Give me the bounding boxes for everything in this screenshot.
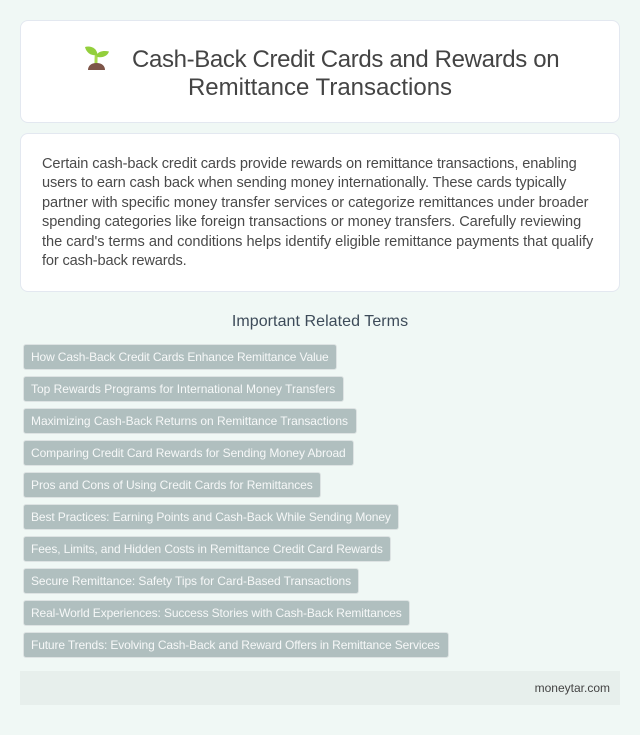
tag 6 — [23, 504, 399, 530]
tag 1: How Cash-Back Credit Cards Enhance Remittance Value — [31, 350, 329, 364]
paragraph — [42, 156, 594, 269]
tag 4: Comparing Credit Card Rewards for Sending Money Abroad — [31, 446, 346, 460]
panel: description — [20, 133, 620, 292]
tag 1 — [23, 344, 337, 370]
paragraph: for cash-back rewards. — [42, 253, 187, 269]
tag 3 — [23, 408, 357, 434]
tag 4 — [23, 440, 354, 466]
paragraph: partner with specific money transfer services or categorize remittances under broader — [42, 195, 588, 211]
tag 3: Maximizing Cash-Back Returns on Remittance Transactions — [31, 414, 348, 428]
tag 9: Real-World Experiences: Success Stories with Cash-Back Remittances — [31, 606, 402, 620]
paragraph: users to earn cash back when sending money internationally. These cards typically — [42, 175, 566, 191]
tag 9 — [23, 600, 410, 626]
paragraph: the card's terms and conditions helps identify eligible remittance payments that qualify — [42, 234, 593, 250]
tag 7: Fees, Limits, and Hidden Costs in Remittance Credit Card Rewards — [31, 542, 383, 556]
panel: title card — [20, 20, 620, 123]
tag 8: Secure Remittance: Safety Tips for Card-Based Transactions — [31, 574, 351, 588]
footer: moneytar.com — [535, 681, 610, 695]
paragraph: Certain cash-back credit cards provide rewards on remittance transactions, enabling — [42, 156, 577, 172]
tag 10 — [23, 632, 449, 658]
list: related term tags — [23, 344, 449, 658]
tag 5: Pros and Cons of Using Credit Cards for Remittances — [31, 478, 313, 492]
icon: sprout — [85, 46, 109, 70]
title line 2: Remittance Transactions — [188, 74, 452, 101]
tag 2 — [23, 376, 344, 402]
tag 6: Best Practices: Earning Points and Cash-Back While Sending Money — [31, 510, 391, 524]
tag 8 — [23, 568, 359, 594]
title line 1: Cash-Back Credit Cards and Rewards on — [132, 46, 559, 73]
paragraph: spending categories like foreign transactions or money transfers. Carefully reviewing — [42, 214, 581, 230]
tag 2: Top Rewards Programs for International Money Transfers — [31, 382, 335, 396]
footer — [20, 671, 620, 705]
tag 7 — [23, 536, 391, 562]
heading: related terms: Important Related Terms — [232, 313, 408, 330]
tag 5 — [23, 472, 321, 498]
tag 10: Future Trends: Evolving Cash-Back and Reward Offers in Remittance Services — [31, 638, 440, 652]
